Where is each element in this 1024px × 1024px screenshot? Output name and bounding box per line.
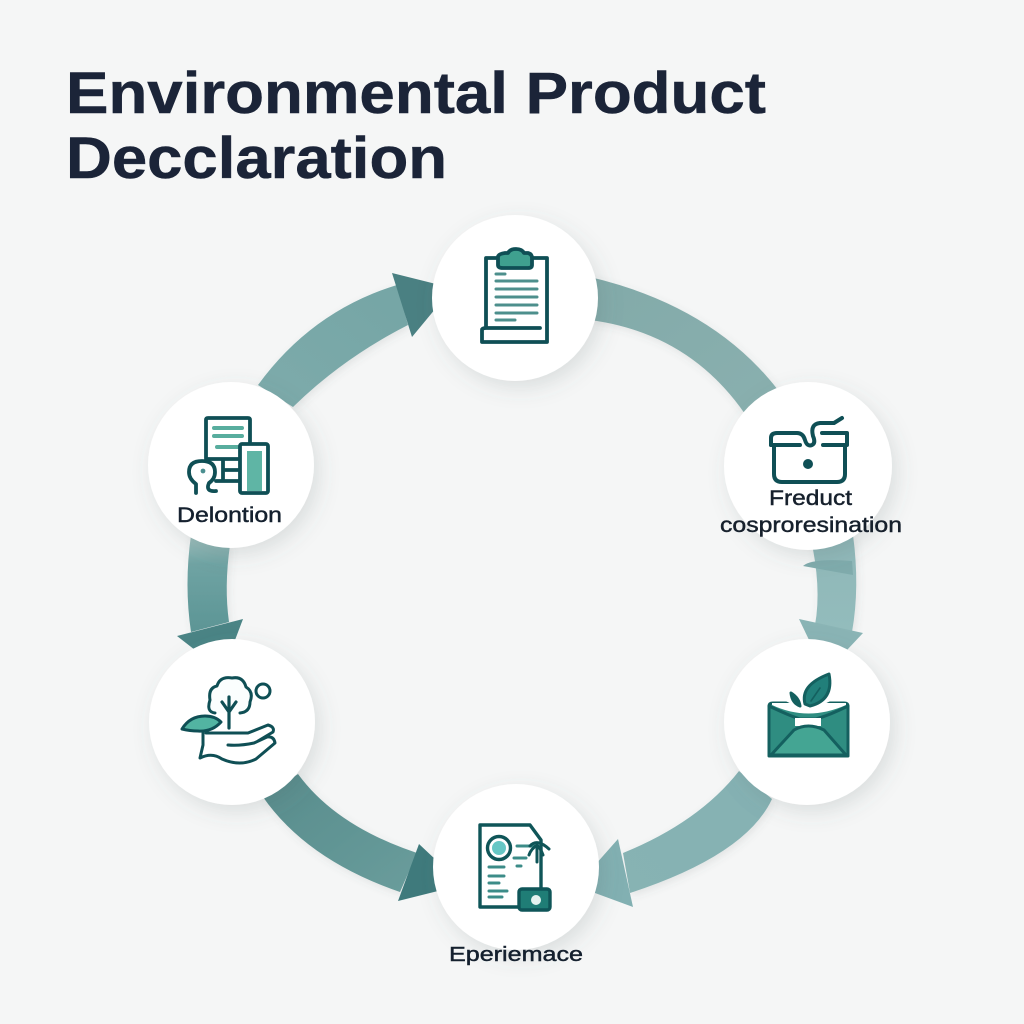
icon: documents and head: [189, 418, 268, 493]
arrow: left to lower left: [177, 535, 243, 650]
label: Delontion: Delontion: [177, 504, 282, 527]
title: Decclaration: [66, 126, 447, 191]
label: Eperiemace: Eperiemace: [449, 944, 583, 966]
icon: document with badge: [480, 825, 550, 910]
icon: envelope with leaf: [769, 674, 848, 756]
icon: folder: [771, 418, 847, 482]
arrow: top to right: [590, 277, 778, 414]
icon: clipboard: [482, 249, 547, 342]
arrow: bottom-left to bottom: [263, 774, 438, 901]
arrow: left to top: [258, 273, 436, 407]
label: Freduct cosproresination: cosproresination: [720, 513, 902, 537]
node: product composition: [720, 382, 902, 550]
title: Environmental Product: [66, 61, 766, 126]
label: Freduct cosproresination: Freduct: [769, 486, 852, 510]
node: hand with plant: [149, 639, 315, 805]
arrow: right to lower right: [799, 535, 863, 650]
title: [66, 61, 766, 191]
node: document: [433, 784, 599, 966]
node: clipboard: [432, 215, 598, 381]
arrow: lower right to bottom: [595, 771, 772, 907]
node: delontion: [148, 382, 314, 548]
label: Freduct cosproresination: [720, 486, 902, 537]
node: envelope: [724, 639, 890, 805]
icon: hand and plant: [182, 678, 275, 763]
